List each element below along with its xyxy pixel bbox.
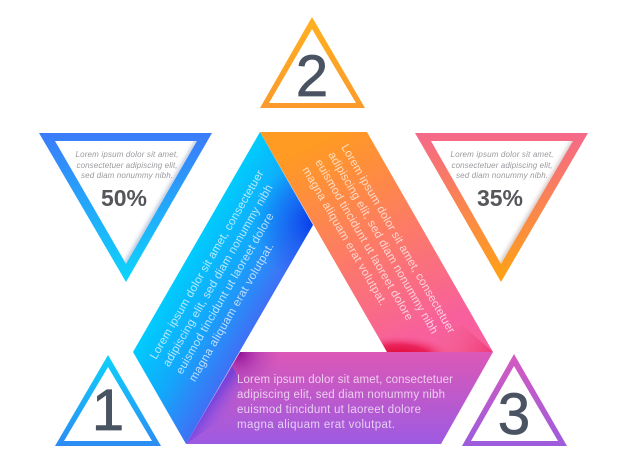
panel: orange band [260,132,493,352]
number 3: 3 [498,382,530,447]
panel: blue band [133,132,313,444]
text block: purple band: adipiscing elit, sed diam nonummy nibh [237,389,445,401]
panel: purple band [186,352,493,444]
text block: blue band: euismod tincidunt ut laoreet dolore [174,211,277,376]
value: 35%: 35% [477,185,523,211]
triangle 3 with number [462,354,567,447]
text block: 50% description: Lorem ipsum dolor sit amet, [76,150,178,159]
triangle 1 with number [55,355,161,446]
text block: purple band: euismod tincidunt ut laoreet dolore [237,404,421,416]
text block: purple band [237,374,453,431]
text block: blue band: magna aliquam erat volutpat. [187,241,277,384]
text block: purple band: Lorem ipsum dolor sit amet, consectetuer [237,374,453,386]
text block: blue band: Lorem ipsum dolor sit amet, consectetuer [148,168,267,362]
text block: 50% description: sed diam nonummy nibh. [81,171,173,180]
number 2: 2 [296,44,328,109]
text block: orange band: Lorem ipsum dolor sit amet, consectetuer [338,142,457,336]
triangle 2 with number [260,17,365,109]
text block: orange band: adipiscing elit, sed diam nonummy nibh [325,150,440,336]
text block: 50% description: consectetuer adipiscing elit, [76,161,178,170]
text block: 50% description [76,150,178,180]
text block: orange band: euismod tincidunt ut laoreet dolore [312,158,415,323]
text block: purple band: magna aliquam erat volutpat. [237,419,395,431]
number 1: 1 [92,378,124,443]
text block: 35% description [450,150,554,180]
panel: 50% inverted triangle [39,133,212,282]
text block: 35% description: sed diam nonummy nibh. [456,171,548,180]
value: 50%: 50% [101,185,147,211]
panel: 35% inverted triangle [415,133,588,282]
text block: orange band: magna aliquam erat volutpat. [299,165,389,308]
text block: blue band: adipiscing elit, sed diam nonummy nibh [161,183,276,369]
text block: 35% description: Lorem ipsum dolor sit amet, [450,150,554,159]
text block: 35% description: consectetuer adipiscing elit, [452,161,552,170]
